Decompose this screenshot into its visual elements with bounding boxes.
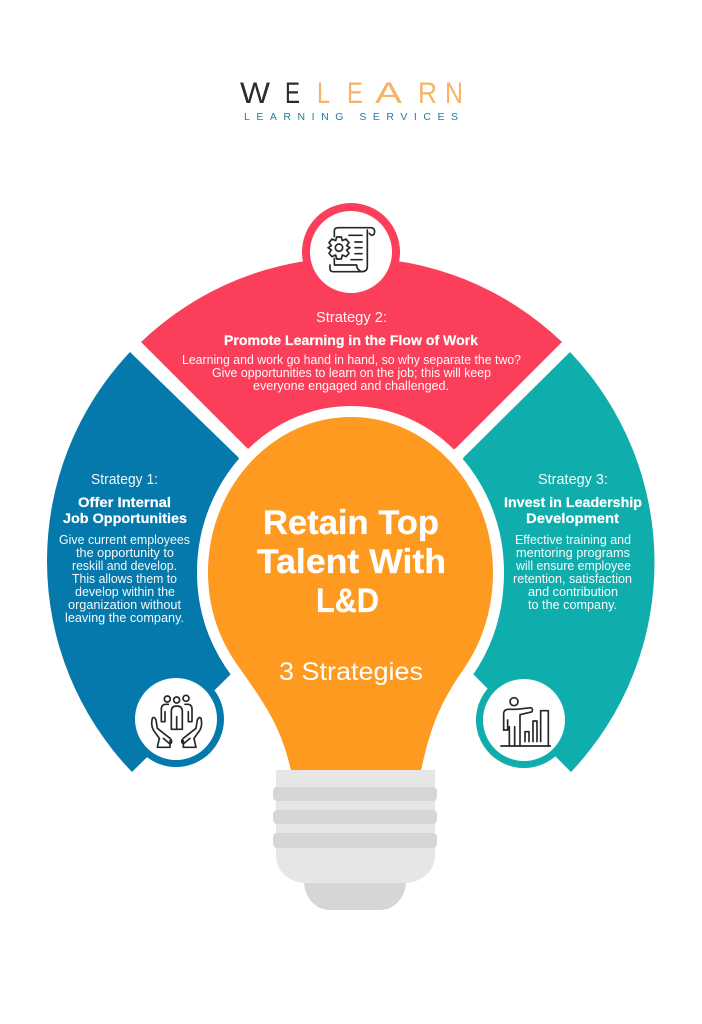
text: strategy 2: Learning and work go hand in hand, so why separate the two? <box>182 353 521 367</box>
bulb socket <box>273 770 437 910</box>
text: strategy 1: develop within the <box>75 585 175 599</box>
text: strategy 3: will ensure employee <box>515 559 631 573</box>
icon: gear and scroll <box>310 211 392 293</box>
text: strategy 2: Promote Learning in the Flow of Work <box>224 332 478 348</box>
icon: person presenting bar chart <box>483 679 565 761</box>
title: Retain Top Talent With L&D: Retain Top <box>263 504 439 542</box>
text: strategy 1: Offer Internal <box>78 494 171 510</box>
logo: WeLearn Learning Services: R <box>418 77 437 110</box>
text: strategy 2: everyone engaged and challenged. <box>253 379 449 393</box>
icon: hands holding people <box>135 678 217 760</box>
text: strategy 1: Give current employees <box>59 533 190 547</box>
text: strategy 3: mentoring programs <box>516 546 630 560</box>
text: strategy 3: Strategy 3: <box>538 472 608 488</box>
bulb glass <box>208 417 493 771</box>
text: strategy 3 <box>504 472 642 612</box>
text: strategy 1: leaving the company. <box>65 611 184 625</box>
title: Retain Top Talent With L&D: Talent With <box>257 543 446 581</box>
logo: WeLearn Learning Services: W <box>240 77 271 110</box>
logo: WeLearn Learning Services: N <box>445 77 463 110</box>
panel: strategy 1 blue segment <box>47 352 300 772</box>
panel: strategy 3 teal segment <box>400 352 655 772</box>
text: strategy 1: organization without <box>68 598 182 612</box>
text: strategy 3: Development <box>526 510 619 526</box>
text: strategy 2: Strategy 2: <box>316 310 387 326</box>
text: strategy 3: Effective training and <box>515 533 631 547</box>
text: strategy 3: and contribution <box>528 585 618 599</box>
logo: WeLearn Learning Services: E <box>285 77 300 110</box>
text: strategy 1: This allows them to <box>72 572 177 586</box>
logo: WeLearn Learning Services: L <box>317 77 330 110</box>
text: strategy 2: Give opportunities to learn on the job; this will keep <box>212 366 491 380</box>
subtitle: 3 Strategies: 3 Strategies <box>279 658 423 686</box>
logo: WeLearn Learning Services <box>240 77 463 123</box>
panel: strategy 2 red segment <box>141 203 562 520</box>
text: strategy 1: Job Opportunities <box>63 510 187 526</box>
title: Retain Top Talent With L&D: L&D <box>316 582 379 620</box>
logo: WeLearn Learning Services: A <box>375 77 402 110</box>
text: strategy 3: retention, satisfaction <box>513 572 632 586</box>
text: strategy 1 <box>59 472 190 625</box>
text: strategy 3: Invest in Leadership <box>504 494 642 510</box>
text: strategy 3: to the company. <box>528 598 617 612</box>
logo: WeLearn Learning Services: E <box>347 77 363 110</box>
text: strategy 1: reskill and develop. <box>72 559 177 573</box>
text: strategy 2 <box>182 310 521 393</box>
text: strategy 1: the opportunity to <box>76 546 174 560</box>
logo: WeLearn Learning Services: LEARNING SERVICES <box>244 111 458 123</box>
text: strategy 1: Strategy 1: <box>91 472 158 488</box>
title: Retain Top Talent With L&D <box>257 504 446 620</box>
